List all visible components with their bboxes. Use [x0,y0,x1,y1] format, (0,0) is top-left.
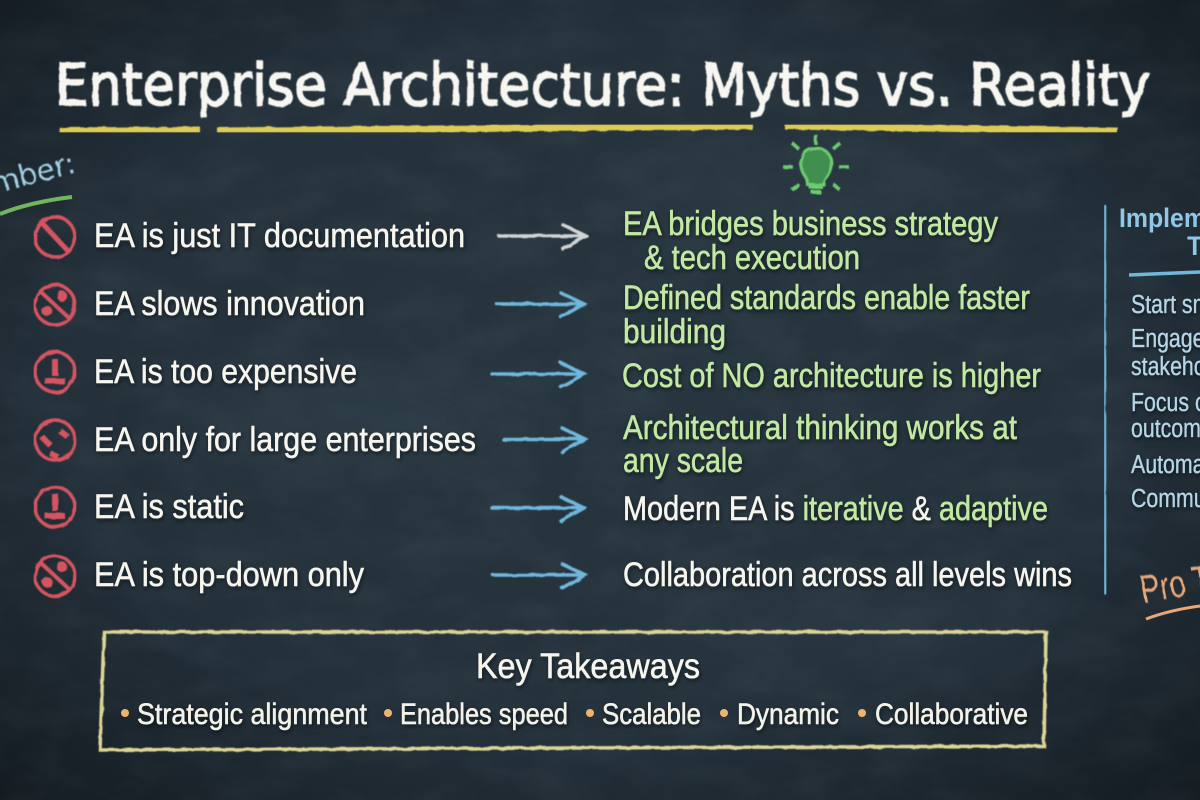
box heading: Key Takeaways [476,647,700,686]
realities list: building [623,313,726,351]
realities list: Modern EA is iterative & adaptive [623,490,1048,528]
arrow 5 [492,497,584,521]
arrow 2 [497,293,584,317]
myths list [94,217,476,594]
realities list: Cost of NO architecture is higher [622,357,1041,395]
myths list: EA is static [94,488,244,526]
realities list [622,205,1072,594]
takeaways list: Scalable [602,698,701,731]
takeaways list [121,698,1028,731]
icon: no documentation [35,217,75,257]
myths list: EA slows innovation [94,285,365,323]
arrow 6 [493,564,585,588]
tips list [1131,290,1200,514]
myths list: EA only for large enterprises [94,421,476,459]
arrow 1 [499,225,586,249]
sidebar divider [1104,205,1106,595]
myths list: EA is just IT documentation [94,217,465,255]
realities list: EA bridges business strategy [623,205,998,243]
sidebar heading underline [1129,272,1200,275]
sidebar heading [1119,204,1200,261]
arrow 3 [492,363,584,387]
icon: too expensive [35,352,75,392]
icon: large enterprises [35,420,75,460]
takeaways list: Strategic alignment [137,698,368,731]
lightbulb icon [783,135,849,192]
arrow 4 [503,428,585,452]
realities list: Defined standards enable faster [623,279,1030,317]
realities list: Architectural thinking works at [623,409,1017,447]
remember underline [0,197,72,214]
icon: top-down [35,556,75,596]
box frame [100,632,1046,750]
title underline [60,126,1118,131]
realities list: any scale [623,442,743,480]
myths list: EA is too expensive [94,353,357,391]
arrows [492,225,586,588]
takeaways list: Collaborative [875,698,1028,731]
myths list: EA is top-down only [94,556,364,594]
takeaways list: Enables speed [400,698,568,731]
icon: slows innovation [35,285,75,325]
key takeaways box [100,632,1046,750]
icon: static [35,487,75,527]
myth icons [35,217,75,596]
realities list: & tech execution [644,239,860,277]
sidebar: implementation tips [1104,204,1200,619]
takeaways list: Dynamic [737,698,839,731]
realities list: Collaboration across all levels wins [623,556,1072,594]
